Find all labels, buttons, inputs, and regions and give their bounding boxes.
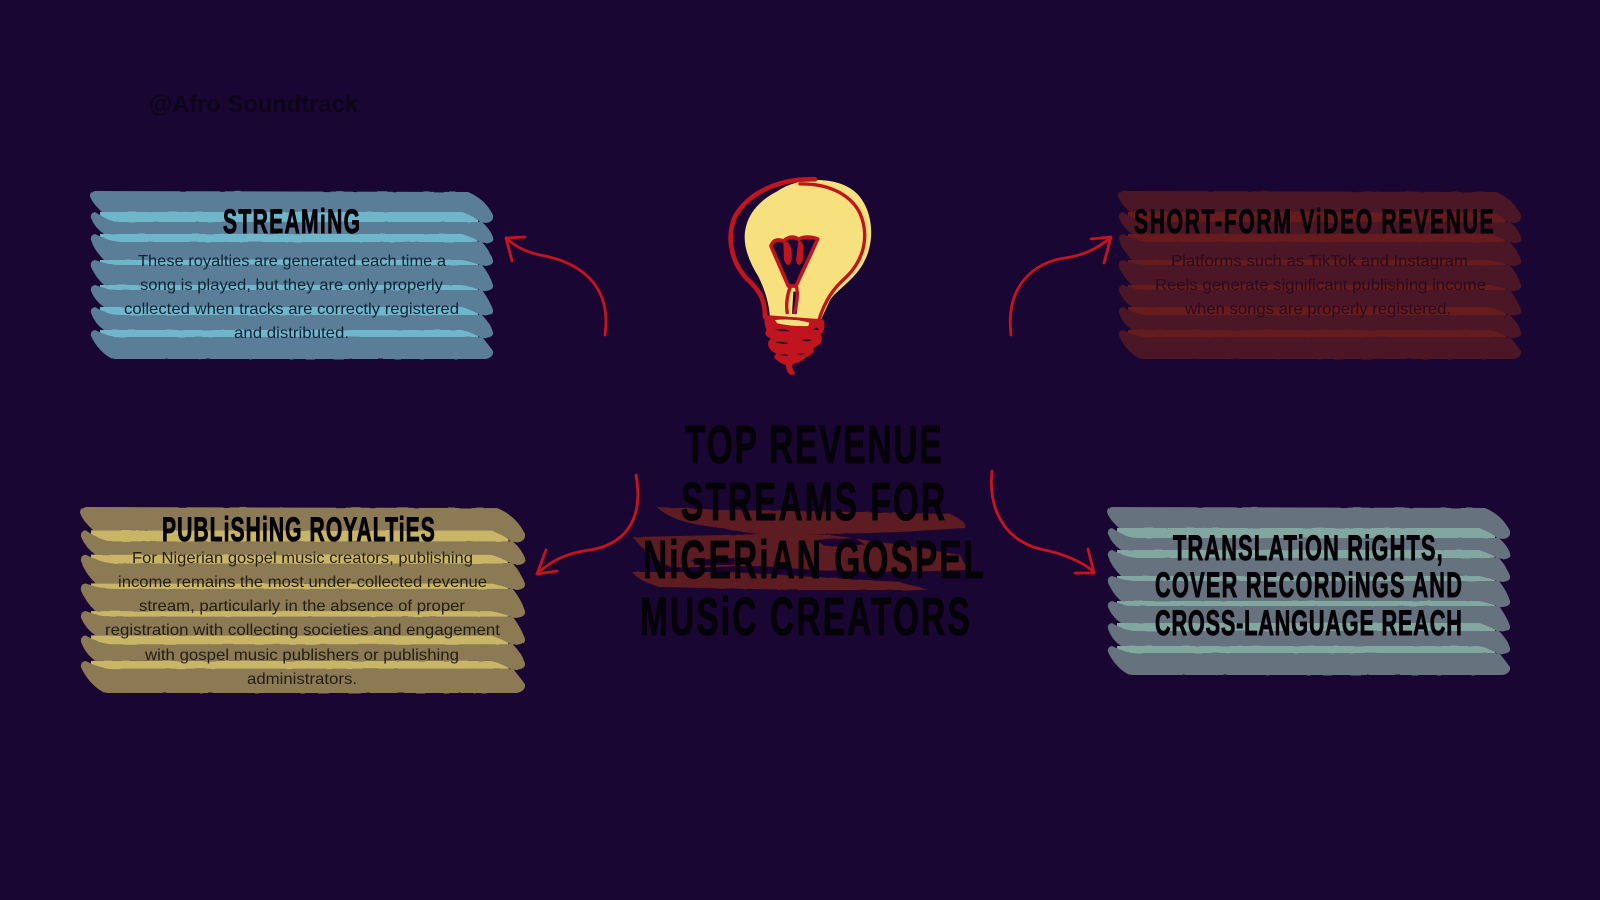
icon: light bulb (731, 179, 871, 375)
title text: NiGERiAN GOSPEL (643, 529, 984, 590)
body text: streaming (124, 253, 459, 342)
body text: streaming: These royalties are generated each time a (138, 253, 446, 270)
panel: publishing royalties (80, 507, 525, 693)
brush accent behind title (632, 507, 968, 590)
panel: translation rights (1107, 507, 1510, 675)
body text: publishing royalties: For Nigerian gospel music creators, publishing (132, 550, 473, 567)
heading: translation rights, cover recordings and cross-language reach: COVER RECORDiNGS AND (1155, 567, 1462, 605)
brush background: slate (1107, 507, 1510, 675)
heading: translation rights, cover recordings and cross-language reach: TRANSLATiON RiGHTS, (1173, 530, 1443, 568)
body text: short-form video (1155, 253, 1486, 318)
body text: publishing royalties: stream, particularly in the absence of proper (139, 598, 466, 615)
body text: streaming: collected when tracks are correctly registered (124, 301, 459, 318)
body text: publishing royalties: income remains the most under-collected revenue (118, 574, 487, 591)
heading: short-form video revenue: SHORT-FORM ViDEO REVENUE (1134, 202, 1494, 240)
brush background: blue (90, 191, 493, 359)
body text: streaming: song is played, but they are only properly (140, 277, 443, 294)
panel: short-form video revenue (1118, 191, 1521, 359)
title text: STREAMS FOR (681, 471, 945, 532)
panel: streaming (90, 191, 493, 359)
arrow: to streaming (506, 237, 606, 335)
body text: streaming: and distributed. (234, 325, 349, 342)
arrow: to publishing royalties (537, 475, 638, 574)
heading: translation rights, cover recordings and cross-language reach: CROSS-LANGUAGE REACH (1155, 605, 1462, 643)
body text: publishing royalties (105, 550, 501, 688)
title: top revenue streams (632, 414, 984, 647)
title text: TOP REVENUE (685, 414, 942, 475)
arrow: to short-form video (1010, 237, 1111, 335)
body text: publishing royalties: administrators. (247, 671, 357, 688)
arrow: to translation rights (991, 471, 1094, 573)
body text: short-form video: when songs are properly registered. (1184, 301, 1451, 318)
title text: MUSiC CREATORS (640, 586, 970, 647)
body text: short-form video: Reels generate significant publishing income (1155, 277, 1486, 294)
body text: publishing royalties: with gospel music publishers or publishing (144, 647, 459, 664)
bulb base (764, 315, 825, 375)
body text: publishing royalties: registration with collecting societies and engagement (105, 622, 501, 639)
brush background: gold (80, 507, 525, 693)
body text: short-form video: Platforms such as TikTok and Instagram (1171, 253, 1468, 270)
heading: publishing royalties: PUBLiSHiNG ROYALTiES (162, 510, 435, 548)
watermark: @Afro Soundtrack: @Afro Soundtrack (149, 91, 359, 118)
heading: translation rights, cover recordings and cross-language reach (1155, 530, 1462, 643)
brush background: dark red (1118, 191, 1521, 359)
heading: streaming: STREAMiNG (223, 202, 360, 240)
title text (640, 414, 984, 647)
